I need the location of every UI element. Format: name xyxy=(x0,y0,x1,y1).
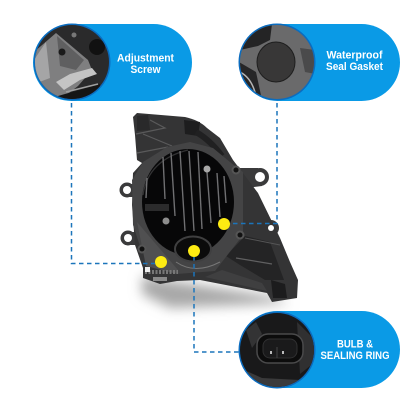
photo: gasket closeup xyxy=(239,24,315,100)
lower right shell panels xyxy=(205,236,287,298)
callout: bulb and sealing ring xyxy=(238,311,400,392)
outer shell xyxy=(132,113,298,302)
callout: adjustment screw xyxy=(33,24,192,101)
label: bulb and sealing ring: BULB & xyxy=(337,338,373,350)
label: adjustment screw: Screw xyxy=(130,64,161,76)
label: waterproof seal gasket: Seal Gasket xyxy=(326,61,383,73)
round collar xyxy=(132,142,243,274)
mounting holes xyxy=(123,172,274,242)
screws xyxy=(204,166,210,172)
connector: waterproof seal gasket xyxy=(229,103,277,224)
label: adjustment screw xyxy=(117,52,174,76)
photo: adjustment screw closeup xyxy=(34,24,110,100)
label: bulb and sealing ring: SEALING RING xyxy=(320,350,390,362)
callout dot: bulb xyxy=(188,245,200,257)
callout: waterproof seal gasket xyxy=(238,24,400,101)
lower left teeth xyxy=(145,270,178,274)
lamp drop shadow xyxy=(142,276,290,308)
label: adjustment screw: Adjustment xyxy=(117,52,174,64)
mounting ears xyxy=(120,168,279,246)
label: waterproof seal gasket: Waterproof xyxy=(326,50,383,62)
callout dot: seal gasket xyxy=(218,218,230,230)
black reflector body xyxy=(142,149,234,255)
lower left collar wedge xyxy=(137,222,178,274)
callout dot: adjustment screw xyxy=(155,256,167,268)
bulb socket xyxy=(175,236,211,262)
connector: adjustment screw xyxy=(72,103,155,264)
photo: bulb connector closeup xyxy=(240,313,314,387)
upper shell ribs xyxy=(136,120,172,153)
adjuster bracket xyxy=(145,204,169,211)
collar bolts xyxy=(138,166,244,252)
label: waterproof seal gasket xyxy=(326,50,383,73)
label: bulb and sealing ring xyxy=(320,338,390,362)
fog lamp housing xyxy=(120,113,298,302)
connector: bulb and sealing ring xyxy=(194,256,240,352)
heat sink fins xyxy=(146,151,226,231)
